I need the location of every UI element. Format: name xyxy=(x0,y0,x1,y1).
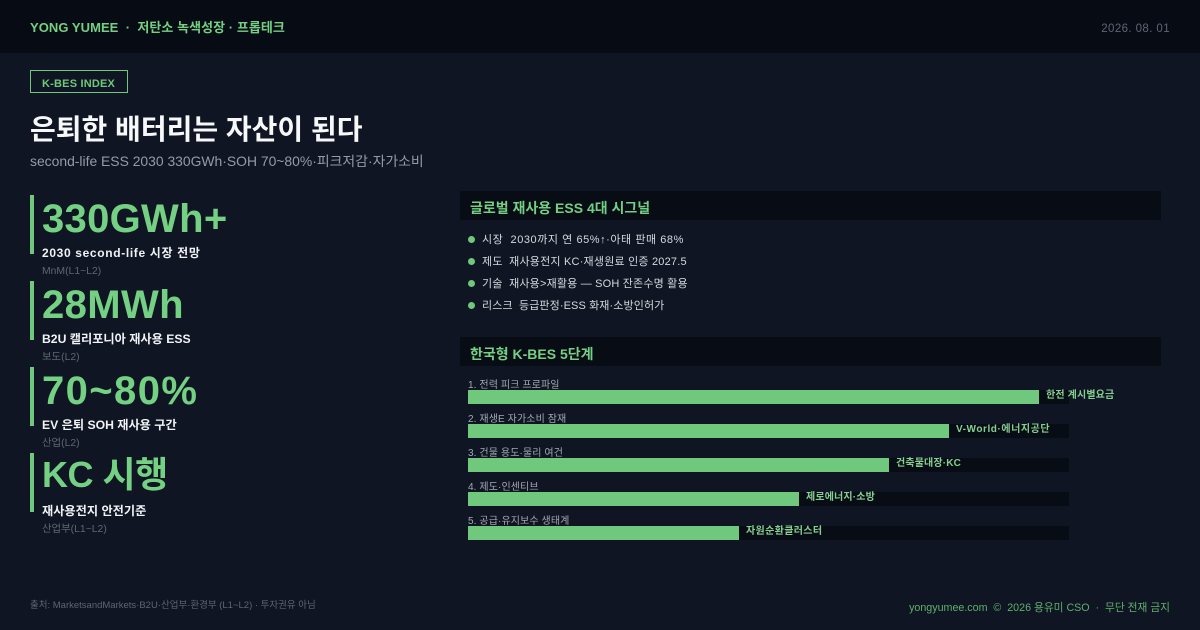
value: KC 시행 xyxy=(42,454,168,495)
title: 은퇴한 배터리는 자산이 된다 xyxy=(30,114,362,145)
source: 보도(L2) xyxy=(42,352,80,363)
value: 70~80% xyxy=(42,369,198,413)
header bar xyxy=(0,0,1200,53)
stage 1: 1. 전력 피크 프로파일 xyxy=(468,380,560,391)
stage 5 xyxy=(468,515,1069,540)
section heading: signals: 글로벌 재사용 ESS 4대 시그널 xyxy=(470,200,650,216)
stage 5: 5. 공급·유지보수 생태계 xyxy=(468,516,569,527)
stage 5: 자원순환클러스터 xyxy=(746,526,822,537)
signal item: technology: 기술 재사용>재활용 — SOH 잔존수명 활용 xyxy=(482,278,688,290)
bar chart: K-BES stages xyxy=(468,379,1114,540)
stage 4: 제로에너지·소방 xyxy=(806,492,875,503)
section heading: signals xyxy=(460,191,1161,220)
date: 2026. 08. 01 xyxy=(1101,23,1170,35)
value: 330GWh+ xyxy=(42,197,228,241)
tag: K-BES INDEX: K-BES INDEX xyxy=(42,78,115,90)
stage 4: 4. 제도·인센티브 xyxy=(468,482,539,493)
signal item: regulation: 제도 재사용전지 KC·재생원료 인증 2027.5 xyxy=(482,256,687,268)
subtitle: second-life ESS 2030 330GWh·SOH 70~80%·피크저감·자가소비 xyxy=(30,153,424,169)
source: MnM(L1~L2) xyxy=(42,266,101,277)
source: 산업부(L1~L2) xyxy=(42,524,107,535)
KPI: 28MWh xyxy=(30,281,191,363)
label: B2U 캘리포니아 재사용 ESS xyxy=(42,332,191,346)
KPI: 70~80% xyxy=(30,367,198,449)
stage 4 xyxy=(468,481,1069,506)
stage 1: 한전 계시별요금 xyxy=(1046,390,1114,401)
section heading: K-BES stages: 한국형 K-BES 5단계 xyxy=(470,346,594,362)
source: 산업(L2) xyxy=(42,438,80,449)
stage 3: 건축물대장·KC xyxy=(896,458,961,469)
stage 3 xyxy=(468,447,1069,472)
signal item: risk: 리스크 등급판정·ESS 화재·소방인허가 xyxy=(482,300,664,312)
stage 2 xyxy=(468,413,1069,438)
KPI: 330GWh+ xyxy=(30,195,228,277)
brand line: YONG YUMEE · 저탄소 녹색성장 · 프롭테크 xyxy=(30,20,285,35)
stage 1 xyxy=(468,379,1114,404)
tag: K-BES INDEX xyxy=(30,70,128,93)
label: 2030 second-life 시장 전망 xyxy=(42,246,201,260)
section heading: K-BES stages xyxy=(460,337,1161,366)
stage 3: 3. 건물 용도·물리 여건 xyxy=(468,448,563,459)
value: 28MWh xyxy=(42,283,184,327)
signal item: market: 시장 2030까지 연 65%↑·아태 판매 68% xyxy=(482,234,684,246)
KPI: KC 시행 xyxy=(30,453,168,535)
footer copyright: yongyumee.com © 2026 용유미 CSO · 무단 전재 금지 xyxy=(909,602,1170,614)
label: 재사용전지 안전기준 xyxy=(42,504,146,518)
stage 2: 2. 재생E 자가소비 잠재 xyxy=(468,414,566,425)
label: EV 은퇴 SOH 재사용 구간 xyxy=(42,418,177,432)
footer source note: 출처: MarketsandMarkets·B2U·산업부·환경부 (L1~L2) · 투자권유 아님 xyxy=(30,600,316,611)
stage 2: V-World·에너지공단 xyxy=(956,424,1050,435)
